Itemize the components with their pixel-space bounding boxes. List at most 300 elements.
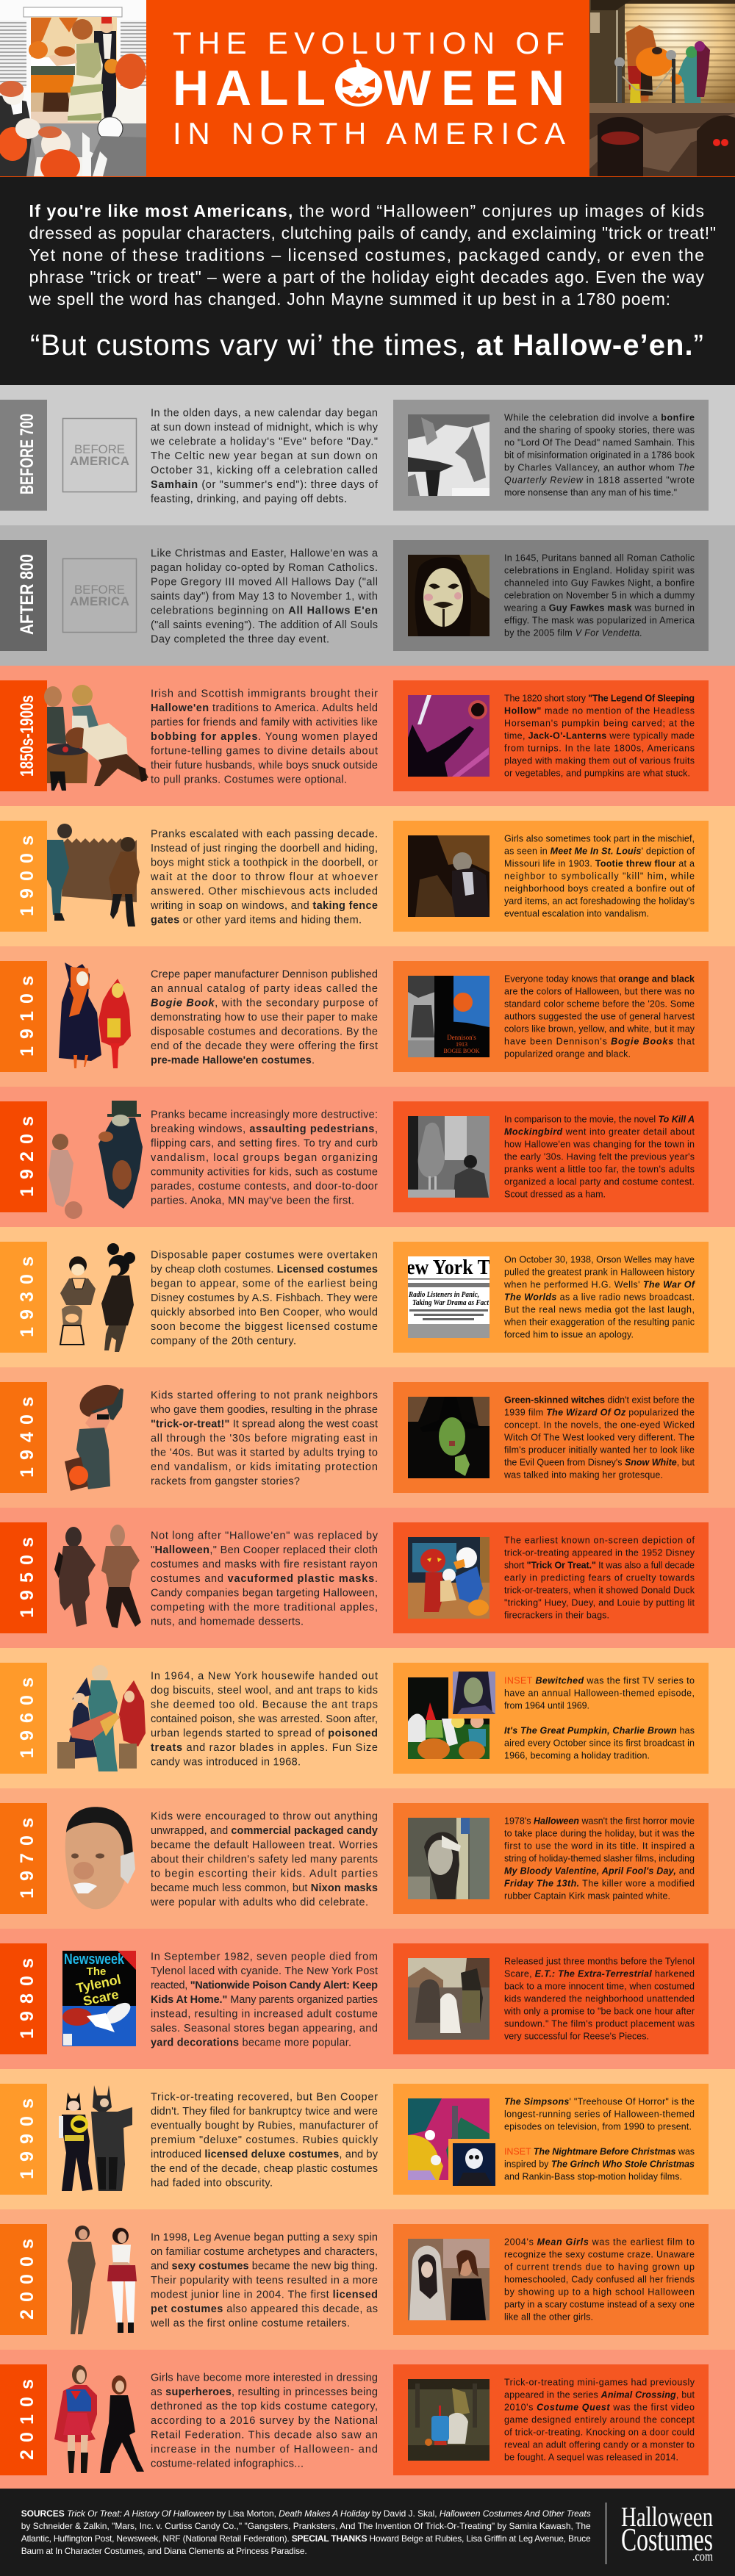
intro paragraph: we spell the word has changed. John Mayne summed it up best in a 1780 poem: [28, 289, 670, 309]
text: vandalism: flipping cars, and setting fires. To try and curb [151, 1137, 378, 1149]
text: Scout: the early '30s. Having felt the previous year's [504, 1152, 695, 1162]
text: trick-or-treat: Kids started offering to not prank neighbors [151, 1390, 378, 1402]
panel: 1960s [0, 1648, 735, 1788]
text: pranks: gates or other yard items and hiding them. [151, 914, 362, 926]
text: vandalism: parties. Anoka, MN may've been the first. [151, 1195, 354, 1206]
text: trick-or-treat: "trick-or-treat!" It spread along the west coast [151, 1418, 378, 1430]
text: Sleepy Hollow: or vegetables, and pumpkins are what stuck. [504, 769, 690, 779]
image: Bogie Book covers: 1913 [456, 1041, 467, 1048]
text: bonfire myth: While the celebration did involve a bonfire [504, 413, 695, 423]
text: Tootie [504, 833, 695, 918]
title: O [340, 60, 378, 116]
panel: 2000s [0, 2209, 735, 2350]
text: Disney short: firecrackers in their bags. [504, 1611, 609, 1621]
text: licensed costumes: by cheap cloth costumes. Licensed costumes [151, 1264, 378, 1276]
text: Disney short: trick-or-treaters, when it showed Donald Duck [504, 1586, 695, 1596]
text: green witches: Witch Of The West looked very different. The [504, 1433, 695, 1443]
text: history: Day completed the three day event. [151, 633, 329, 645]
image: Mean Girls party [408, 2239, 490, 2320]
logo: HalloweenCostumes.com [606, 2502, 713, 2564]
text: Halloween spelling: nuts, and homemade desserts. [151, 1616, 304, 1628]
text: Ben Cooper and Rubies: Trick-or-treating recovered, but Ben Cooper [151, 2091, 378, 2103]
text: superheroes: according to a 2016 survey by the National [151, 2415, 378, 2427]
text: pranks: Instead of just ringing the doorbell and hiding, [151, 843, 378, 855]
side panel [393, 1663, 709, 1774]
text: licensed costumes: company of the 20th century. [151, 1336, 296, 1348]
text: Ben Cooper and Rubies: had faded into obscurity. [151, 2178, 273, 2190]
image: paper witch and red riding hood costumes [59, 963, 131, 1068]
side panel [393, 2224, 709, 2335]
text: E.T.: Scare, E.T.: The Extra-Terrestrial harkened [504, 1969, 695, 1979]
image: pranksters and top-hat man [49, 1101, 143, 1219]
era tab: 1980s [17, 1958, 37, 2039]
era tab: 1850s-1900s [17, 695, 37, 777]
text: slasher films: Friday The 13th. The killer wore a modified [504, 1878, 695, 1888]
text: immigrants: parties for friends and family with activities like [151, 717, 378, 729]
image: New York Times front page: ew York T [406, 1256, 490, 1279]
text: Simpsons and Nightmare: inspired by The Grinch Who Stole Christmas [504, 2159, 695, 2169]
text: slasher films [504, 1816, 695, 1902]
text: Scout: Mockingbird went into greater detail about [504, 1127, 695, 1137]
side panel [393, 1943, 709, 2054]
text: Scout: pranks went a little too far, the town's adults [504, 1164, 695, 1174]
text: Bogie Book: demonstrating how to use their paper to make [151, 1012, 378, 1023]
text: Ben Cooper and Rubies: didn't. They filed for bankruptcy twice and were [151, 2106, 378, 2118]
image: E.T. Halloween scene [408, 1958, 490, 2040]
side panel [393, 1382, 709, 1493]
text: history: pagan holiday co-opted by Roman Catholics. [151, 562, 378, 574]
text: vandalism: vandalism, local groups began organizing [151, 1152, 378, 1164]
text: Disney short: The earliest known on-screen depiction of [504, 1536, 695, 1546]
text: orange and black: are the colors of Halloween, but there was no [504, 986, 695, 996]
text: Guy Fawkes Night: celebrations in England. Holiday spirit was [504, 566, 695, 576]
text: Bogie Book: Crepe paper manufacturer Dennison published [151, 968, 378, 980]
text: licensed costumes: began to appear, some of the earliest being [151, 1278, 378, 1290]
text: Guy Fawkes Night: channeled into Guy Fawkes Night, a bonfire [504, 578, 695, 588]
era tab: 1970s [17, 1818, 37, 1899]
side panel [393, 821, 709, 932]
text: pranks [150, 829, 378, 926]
text: licensed costumes: Disney costumes by A.S. Fishbach. They were [151, 1292, 378, 1304]
era tab [0, 2084, 47, 2195]
text: trick-or-treat: the '40s. But was it started by adults trying to [151, 1447, 378, 1459]
image: Disney licensed costumes line art [60, 1243, 135, 1352]
text: orange and black: colors like brown, yellow, and white, but it may [504, 1024, 695, 1035]
text: vandalism: Pranks became increasingly more destructive: [151, 1109, 378, 1121]
text: Ben Cooper and Rubies: premium "deluxe" costumes. Rubies quickly [151, 2134, 379, 2146]
text: history [150, 407, 379, 506]
text: bonfire myth: Quarterly Review in 1818 asserted "wrote [504, 475, 695, 485]
panel: 1850s-1900s [0, 666, 735, 806]
panel: 1920s [0, 1087, 735, 1227]
text: trick-or-treat: end vandalism, or kids imitating protection [151, 1461, 378, 1473]
text: poisoned treats [151, 1671, 378, 1768]
era tab: 1990s [17, 2098, 37, 2179]
sources text: Baum at In Character Costumes, and Diana Clements at Princess Paradise. [21, 2546, 307, 2556]
text: licensed costumes [151, 1249, 378, 1348]
text: Guy Fawkes Night: by the 2005 film V For Vendetta. [504, 627, 642, 638]
text: Disney short [504, 1536, 695, 1621]
text: packaged candy: became much less common, but Nixon masks [151, 1882, 378, 1894]
image: New York Times front page: Radio Listeners in Panic, [408, 1290, 479, 1299]
text: Sleepy Hollow: The 1820 short story "The Legend Of Sleeping [504, 694, 695, 704]
text: Mean Girls: by showing up to a high school Halloween [504, 2287, 695, 2297]
text: Sleepy Hollow: played with making them out of various fruits [504, 755, 695, 766]
text: Costume Quest: game designed entirely around the concept [504, 2414, 695, 2425]
text: Halloween spelling: competing with the more traditional apples, [151, 1602, 378, 1613]
text: Disney short: short "Trick Or Treat." It was also a full decade [504, 1561, 695, 1571]
text: superheroes: Retail Federation. This decade also saw an [151, 2429, 378, 2441]
text: Simpsons and Nightmare [504, 2097, 695, 2182]
panel: 1910s [0, 946, 735, 1087]
image: Bewitched inset [448, 1672, 495, 1719]
text: immigrants: bobbing for apples. Young women played [151, 731, 378, 743]
image: children in 1950s plastic masks [54, 1525, 141, 1628]
text: Tylenol scare [151, 1951, 378, 2048]
text: Halloween spelling: "Halloween," Ben Cooper replaced their cloth [151, 1544, 378, 1556]
text: history: October 31, kicking off a celebration called [151, 464, 378, 476]
text: packaged candy: became the default Halloween treat. Worries [151, 1840, 378, 1852]
text: Simpsons and Nightmare: episodes on television, from 1990 to present. [504, 2122, 692, 2132]
panel: 1930s [0, 1227, 735, 1367]
image: Batman costumes [59, 2085, 132, 2191]
text: packaged candy: Kids were encouraged to throw out anything [151, 1810, 378, 1822]
intro paragraph [28, 201, 716, 309]
image: Bogie Book covers: BOGIE BOOK [443, 1048, 480, 1054]
text: vandalism: parades, costume contests, and door-to-door [151, 1181, 378, 1192]
text: superheroes: costume-related infographics... [151, 2458, 304, 2470]
image: Wicked Witch of the West [408, 1397, 490, 1478]
text: E.T. [503, 1956, 695, 2041]
panel: 1950s [0, 1508, 735, 1648]
image: Bogie Book covers: Dennison's [447, 1034, 476, 1041]
text: packaged candy: about their children's safety led many parents [151, 1854, 378, 1866]
side panel [393, 540, 709, 651]
text: immigrants: to pull pranks. Costumes were optional. [151, 774, 347, 786]
text: Mean Girls: 2004's Mean Girls was the earliest film to [504, 2237, 695, 2247]
text: history: Samhain (or "summer's end"): three days of [151, 479, 379, 491]
text: trick-or-treat: all through the '30s before migrating east in [151, 1433, 378, 1444]
text: history: Pope Gregory III moved All Hallows Day ("all [151, 576, 378, 588]
text: Tylenol scare: Kids At Home." Many parents organized parties [151, 1994, 378, 2006]
panel: before 700 [0, 385, 735, 525]
footer [0, 2489, 735, 2576]
text: Guy Fawkes Night: celebration on November 5 in which a dummy [504, 591, 695, 601]
text: Simpsons and Nightmare: INSET The Nightmare Before Christmas was [504, 2147, 695, 2157]
text: War of the Worlds: But the real news media got the last laugh, [504, 1305, 695, 1315]
text: Tootie: eventual escalation into vandalism. [504, 908, 649, 918]
text: Tootie: neighborhood boys created a bonfire out of [504, 883, 695, 893]
text: Tylenol scare: Tylenol laced with cyanide. The New York Post [151, 1965, 378, 1977]
text: poisoned treats: contained poison, she was arrested. Soon after, [151, 1713, 378, 1725]
logo: HalloweenCostumes.com: .com [692, 2549, 713, 2564]
side panel [393, 680, 709, 791]
text: bonfire myth: more nonsense than any man of his time." [504, 488, 677, 498]
text: sexy costumes: well as the first online costume retailers. [150, 2317, 350, 2329]
header panel [0, 0, 735, 183]
title: WEEN [384, 60, 564, 116]
text: Bogie Book: pre-made Hallowe'en costumes. [151, 1055, 315, 1067]
text: orange and black: authors suggested the use of general harvest [504, 1011, 695, 1021]
title: HALL [173, 60, 326, 116]
text: Mean Girls [504, 2237, 695, 2322]
before america box: AMERICA [70, 454, 129, 468]
text: pranks: wait at the door to throw flour at whoever [150, 871, 378, 883]
image: superhero costumes [54, 2365, 144, 2473]
image: Guy Fawkes mask [408, 555, 490, 636]
text: slasher films: to take place during the holiday, but it was the [504, 1828, 695, 1838]
text: pranks: answered. Other mischievous acts included [151, 886, 378, 898]
text: Guy Fawkes Night [503, 553, 695, 638]
image: masked child with treat bag [65, 1378, 127, 1491]
image: sexy costumes [68, 2226, 137, 2334]
panel: 1980s [0, 1929, 735, 2069]
text: War of the Worlds: On October 30, 1938, Orson Welles may have [504, 1255, 695, 1265]
before america box: BEFORE [74, 442, 125, 456]
text: superheroes: increase in the number of Halloween- and [151, 2444, 378, 2456]
panel: after 800 [0, 525, 735, 666]
era tab: 1950s [17, 1537, 37, 1618]
text: Tootie: Missouri life in 1903. Tootie threw flour at a [504, 858, 695, 868]
text: pranks: writing in soap on windows, and taking fence [150, 900, 378, 912]
text: Costume Quest: Trick-or-treating mini-games had previously [504, 2378, 695, 2388]
text: Halloween spelling: costumes and vacuformed plastic masks. [151, 1573, 378, 1585]
text: history: feasting, drinking, and paying off debts. [151, 494, 347, 506]
before america box [63, 419, 137, 492]
text: Bogie Book: disposable costumes and decorations. By the [151, 1026, 378, 1037]
sources text [21, 2508, 591, 2556]
text: War of the Worlds: The Worlds as a live radio news broadcast. [504, 1292, 695, 1302]
era tab: 1900s [17, 835, 37, 916]
side panel [393, 961, 709, 1072]
title: THE EVOLUTION OF [173, 26, 564, 60]
text: orange and black: have been Dennison's Bogie Books that [504, 1036, 695, 1046]
text: superheroes: Girls have become more interested in dressing [151, 2372, 378, 2383]
text: Costume Quest: reveal an adult offering candy or a monster to [504, 2439, 695, 2450]
text: Tootie: neighbor to symbolically "kill" him, while [504, 871, 695, 882]
text: E.T.: back to a more innocent time, when costumed [504, 1981, 695, 1991]
text: orange and black: Everyone today knows that orange and black [504, 974, 695, 985]
text: green witches [503, 1395, 695, 1480]
text: licensed costumes: Disposable paper costumes were overtaken [151, 1249, 378, 1261]
text: Mean Girls: recognize the sexy costume craze. Unaware [504, 2250, 695, 2260]
text: Simpsons and Nightmare: and Rankin-Bass stop-motion holiday films. [504, 2172, 682, 2182]
era tab: 1910s [17, 976, 37, 1057]
text: War of the Worlds: pulled the greatest prank in Halloween history [504, 1267, 695, 1277]
image: engraving of a figure by a stone [408, 414, 490, 496]
era tab: 2010s [17, 2379, 37, 2460]
text: Sleepy Hollow [504, 694, 695, 779]
text: Disney short: early in predicting fears of cruelty towards [504, 1572, 695, 1583]
text: history: ("all saints evening"). The addition of All Souls [151, 619, 378, 631]
text: War of the Worlds: forced him to issue an apology. [504, 1330, 634, 1340]
text: poisoned treats: she deemed too old. Because the ant traps [151, 1699, 378, 1710]
text: Disney short: trick-or-treating appeared in the 1952 Disney [504, 1547, 695, 1558]
text: Bogie Book: an annual catalog of party ideas called the [151, 983, 378, 995]
text: Disney short: "tricking" Huey, Duey, and Louie by putting lit [504, 1597, 695, 1608]
image: Costume Quest game [408, 2379, 490, 2461]
title [173, 26, 565, 151]
text: Costume Quest: appeared in the series Animal Crossing, but [504, 2389, 695, 2400]
image: New York Times front page [406, 1256, 490, 1338]
text: Halloween spelling [151, 1530, 379, 1628]
title: IN NORTH AMERICA [173, 116, 565, 151]
text: sexy costumes: on familiar costume archetypes and characters, [151, 2246, 378, 2258]
era tab [0, 1382, 47, 1493]
text: Sleepy Hollow: from turnips. In the late 1800s, Americans [504, 744, 695, 754]
text: licensed costumes: quickly absorbed into Ben Cooper, who would [151, 1306, 378, 1318]
image: housewife handing candy to kids [57, 1665, 146, 1771]
before america box: AMERICA [70, 594, 129, 608]
era tab: 1930s [17, 1256, 37, 1337]
text: immigrants [151, 688, 378, 786]
text: history: The Celtic new year began at sun down on [151, 450, 378, 462]
text: E.T.: Released just three months before the Tylenol [504, 1956, 695, 1966]
image: Headless Horseman [408, 695, 490, 784]
text: bonfire myth: no "Lord Of The Dead" named Samhain. This [504, 438, 695, 448]
era tab [0, 961, 47, 1072]
text: bonfire myth: by Charles Vallancey, an author whom The [504, 463, 695, 473]
text: bonfire myth [504, 413, 695, 498]
text: Bewitched and Great Pumpkin: have an annual Halloween-themed episode, [504, 1688, 695, 1699]
era tab [0, 1101, 47, 1212]
image: Nightmare Before Christmas inset [448, 2139, 495, 2186]
side panel [393, 2364, 709, 2475]
text: Scout: organized a local party and costume contest. [504, 1177, 695, 1187]
text: sexy costumes: Their popularity with teens resulted in a more [151, 2275, 378, 2287]
text: sexy costumes: and sexy costumes became the new big thing. [151, 2260, 378, 2272]
text: poisoned treats: In 1964, a New York housewife handed out [151, 1671, 378, 1683]
text: immigrants: fortune-telling games to divine details about [151, 745, 378, 757]
text: Costume Quest: of trick-or-treating. Knocking on a door could [504, 2428, 695, 2438]
era tab [0, 400, 47, 511]
text: green witches: was talked into making her grotesque. [503, 1469, 663, 1480]
image: children trick-or-treating on a porch [589, 0, 735, 176]
text: Bogie Book: end of the decade they were offering the first [151, 1040, 378, 1052]
text: green witches: the Evil Queen from Disney's Snow White, but [504, 1458, 695, 1468]
sources text: Atlantic, Huffington Post, Newsweek, NRF (National Retail Federation). SPECIAL THANKS Howard Beige at Rubies, Lisa Griffin at Leg Avenue, Bruce [21, 2533, 591, 2544]
text: Tylenol scare: In September 1982, seven people died from [151, 1951, 378, 1963]
intro paragraph: If you're like most Americans, the word “Halloween” conjures up images of kids [29, 201, 704, 220]
era tab: AFTER 800 [17, 554, 37, 635]
side panel [393, 1242, 709, 1353]
text: Mean Girls: of current trends due to having grown up [504, 2262, 695, 2272]
image: Michael Myers in Halloween [408, 1818, 490, 1899]
text: Bewitched and Great Pumpkin [504, 1675, 695, 1760]
text: licensed costumes: soon become the biggest licensed costume [151, 1321, 378, 1333]
text: Guy Fawkes Night: wearing a Guy Fawkes mask was burned in [503, 602, 695, 613]
text: Bogie Book [151, 968, 379, 1067]
text: green witches: film's producer initially wanted her to look like [504, 1444, 695, 1455]
text: Scout [504, 1114, 695, 1199]
text: Tylenol scare: sales. Seasonal stores began appearing, and [151, 2023, 378, 2034]
text: Tylenol scare: yard decorations became more popular. [151, 2037, 351, 2048]
text: E.T.: kids wandered the neighborhood unattended [504, 1994, 695, 2004]
image: Meet Me In St. Louis still [408, 835, 490, 917]
era tab [0, 540, 47, 651]
text: vandalism [151, 1109, 378, 1206]
text: slasher films: string of holiday-themed slasher films, including [504, 1853, 695, 1863]
image: Nixon mask [65, 1807, 135, 1909]
text: packaged candy [150, 1810, 378, 1909]
text: Tootie: yard items, an act foreshadowing the holiday's [504, 896, 695, 907]
text: Simpsons and Nightmare: longest-running series of Halloween-themed [504, 2109, 695, 2119]
text: E.T.: sundown." The film's product placement was [504, 2019, 695, 2029]
text: Mean Girls: party in a scary costume instead of a sexy one [504, 2300, 695, 2310]
text: Simpsons and Nightmare: The Simpsons' "Treehouse Of Horror" is the [504, 2097, 695, 2107]
text: green witches: concept. In the novels, the one-eyed Wicked [504, 1420, 695, 1430]
text: Scout: how Hallowe'en was changing for the town in [504, 1139, 695, 1149]
text: superheroes: dethroned as the top kids costume category, [151, 2401, 378, 2413]
text: sexy costumes [150, 2232, 378, 2329]
text: history: at sun down instead of midnight, which is why [151, 422, 379, 433]
text: Sleepy Hollow: time, Jack-O'-Lanterns were typically made [504, 730, 695, 741]
text: sexy costumes: pet costumes also appeared this decade, as [151, 2303, 378, 2315]
text: superheroes [151, 2372, 378, 2470]
text: Ben Cooper and Rubies [151, 2091, 379, 2190]
era tab [0, 680, 47, 791]
text: pranks: Pranks escalated with each passing decade. [151, 829, 378, 841]
text: poisoned treats: dog biscuits, steel wool, and ant traps to kids [151, 1685, 378, 1697]
image: Newsweek Tylenol Scare cover: Newsweek [64, 1951, 125, 1968]
text: history: we celebrate a holiday's "Eve" before "Day." [150, 436, 378, 448]
text: Tylenol scare: reacted, "Nationwide Poison Candy Alert: Keep [151, 1979, 378, 1991]
text: Bewitched and Great Pumpkin: 1966, becoming a holiday tradition. [504, 1750, 650, 1760]
image: Newsweek Tylenol Scare cover: Tylenol [75, 1972, 122, 1996]
before america box [63, 558, 137, 632]
text: orange and black: popularized orange and black. [504, 1049, 631, 1059]
side panel [393, 2084, 709, 2195]
text: pranks: boys might stick a toothpick in the doorbell, or [151, 857, 378, 868]
text: Scout: In comparison to the movie, the novel To Kill A [504, 1114, 695, 1124]
intro paragraph: dressed as popular characters, clutching pails of candy, and exclaiming "trick or treat!" [29, 223, 716, 242]
before america box: BEFORE [74, 583, 125, 597]
text: War of the Worlds [503, 1255, 696, 1340]
text: War of the Worlds: when their exaggeration of the resulting panic [503, 1317, 695, 1327]
era tab: 1940s [17, 1397, 37, 1478]
text: orange and black: standard color scheme before the '20s. Some [504, 999, 695, 1010]
text: packaged candy: unwrapped, and commercial packaged candy [151, 1825, 378, 1837]
text: vandalism: community activities for kids, such as costume [151, 1167, 378, 1179]
text: Costume Quest [504, 2378, 695, 2463]
text: packaged candy: to begin escorting their kids. Adult parties [151, 1868, 378, 1879]
text: Halloween spelling: costumes and masks with fire resistant rayon [151, 1559, 378, 1571]
image: children bobbing for apples [44, 685, 148, 791]
text: Sleepy Hollow: Hollow" made no mention of the Headless [504, 705, 695, 716]
image: boys stealing a fence gate [47, 824, 140, 927]
era tab: 1960s [17, 1677, 37, 1758]
intro paragraph: Yet none of these traditions – licensed costumes, packaged candy, or even the [29, 245, 704, 265]
text: immigrants: Hallowe'en traditions to America. Adults held [151, 702, 378, 714]
text: Ben Cooper and Rubies: the end of the decade, cheap plastic costumes [151, 2163, 378, 2175]
text: history [151, 548, 379, 645]
sources text: by Schneider & Zalkin, "Mars, Inc. v. Curtiss Candy Co.," "Gangsters, Pranksters, And The Invention Of Trick-Or-Treating" by Samira Kawash, The [21, 2521, 591, 2531]
text: vandalism: breaking windows, assaulting pedestrians, [151, 1123, 378, 1135]
text: history: Like Christmas and Easter, Hallowe'en was a [151, 548, 379, 560]
text: Tylenol scare: instead, resulting in increased adult costume [151, 2009, 378, 2021]
text: Halloween spelling: Not long after "Hallowe'en" was replaced by [151, 1530, 379, 1541]
text: slasher films: My Bloody Valentine, April Fool's Day, and [504, 1866, 695, 1877]
image: Newsweek Tylenol Scare cover: Scare [82, 1987, 120, 2009]
text: slasher films: 1978's Halloween wasn't the first horror movie [504, 1816, 695, 1827]
text: Guy Fawkes Night: effigy. The mask was popularized in America [504, 616, 695, 626]
panel: 1990s [0, 2069, 735, 2209]
side panel [393, 1522, 709, 1633]
era tab: BEFORE 700 [17, 414, 37, 494]
image: Newsweek Tylenol Scare cover: The [87, 1965, 106, 1978]
text: trick-or-treat [150, 1390, 378, 1487]
image: Great Pumpkin still [408, 1677, 490, 1760]
